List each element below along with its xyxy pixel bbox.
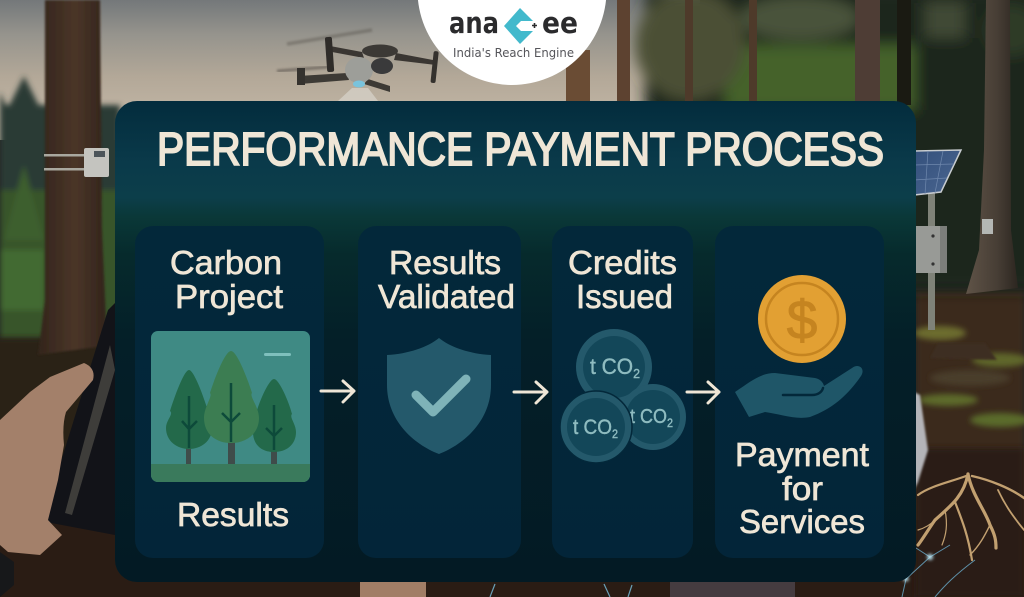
tablet held in hand [0,303,115,597]
icon: drone [277,30,439,101]
tablet [44,303,115,535]
card: credits issued [552,226,693,558]
forest floor [0,338,120,597]
logo icon: teal diamond [504,8,533,44]
tree trunks background [38,0,1018,355]
icon: right carbon credit coin [620,384,686,450]
hand [0,363,94,555]
main panel [115,101,916,582]
icon: solar panel station [914,150,993,330]
distant tree line left [0,76,120,340]
icon: right carbon credit coin: t CO [630,406,671,428]
card heading [378,244,515,315]
logo wordmark right: ee [542,6,578,40]
icon: top carbon credit coin [576,329,652,405]
icon: shield with check [387,338,491,454]
tree stump [930,343,997,360]
card heading: Project [175,278,283,315]
icon: gold dollar coin: $ [787,289,817,351]
arrow 3 [687,382,719,403]
card heading: Validated [378,278,515,315]
icon: gold dollar coin [758,275,846,363]
arrow 1 [321,381,354,402]
card heading: Results [389,244,501,281]
card: carbon project results [135,226,324,558]
icon: sensor on left tree [44,148,109,177]
card caption [735,436,869,540]
card caption: Results [177,496,289,533]
right forest canopy [635,0,1024,290]
glowing tree roots [918,474,1024,560]
sky [0,0,700,140]
card: results validated [358,226,521,558]
card caption: Payment [735,436,869,473]
logo wordmark left: ana [449,6,499,40]
icon: open hand [735,366,863,418]
card heading [568,244,677,315]
left large trunk [38,0,112,355]
icon: left carbon credit coin: t CO [573,416,616,439]
glowing network nodes [490,545,975,597]
card caption: for [782,470,823,507]
icon: left carbon credit coin: 2 [612,427,618,441]
mossy ground patches [914,326,1024,597]
logo plus separator [532,23,537,28]
card heading: Issued [576,278,673,315]
icon: top carbon credit coin: t CO [590,354,635,379]
logo badge [418,0,606,85]
card heading: Credits [568,244,677,281]
cloth sack at right edge [914,392,928,490]
card heading: Carbon [170,244,282,281]
title: PERFORMANCE PAYMENT PROCESS [157,123,884,175]
icon: left carbon credit coin [560,391,632,463]
icon: three trees illustration [151,331,310,482]
icon: right carbon credit coin: 2 [667,416,673,430]
logo tagline: India's Reach Engine [453,45,574,60]
icon: top carbon credit coin: 2 [633,366,640,381]
right large trunk [966,0,1018,294]
card heading [170,244,283,315]
figures below panel [360,582,795,597]
arrow 2 [514,382,547,403]
card: payment for services [715,226,884,558]
card caption: Services [739,503,865,540]
